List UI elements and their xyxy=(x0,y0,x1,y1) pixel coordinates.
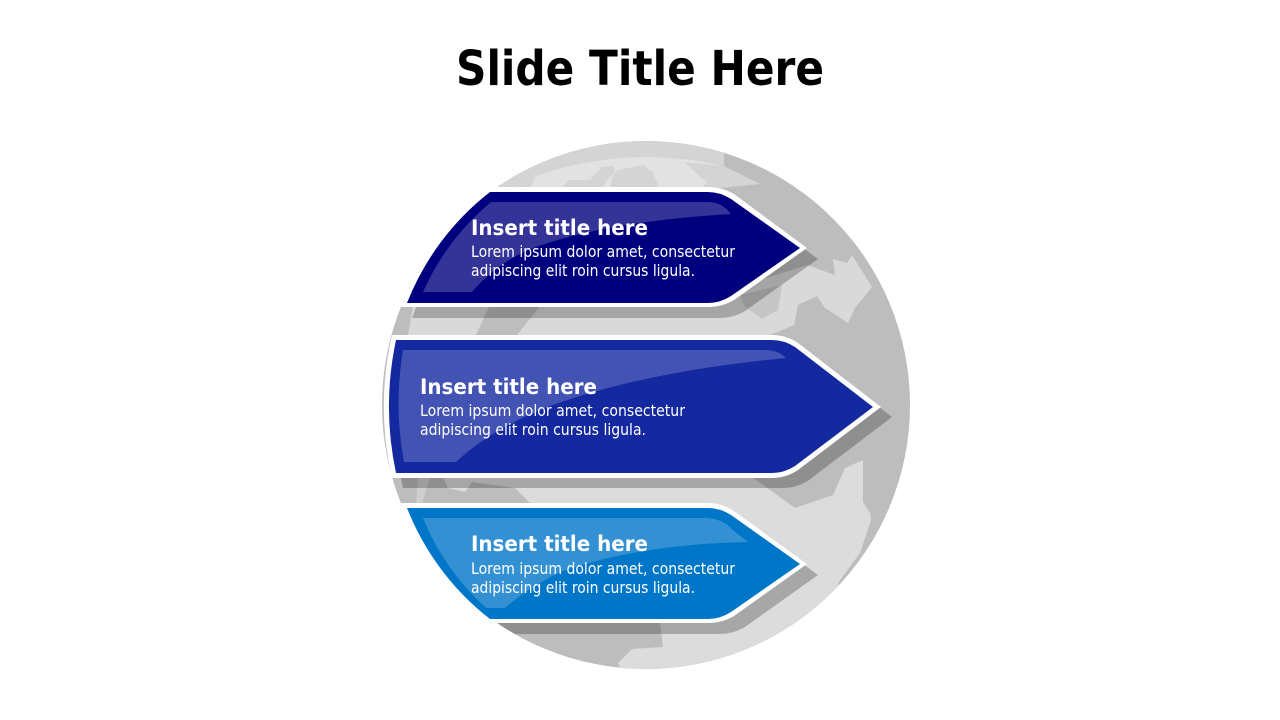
panel shadow: top xyxy=(412,250,818,318)
panel shadow: middle xyxy=(401,408,892,488)
panel: bottom arrow: adipiscing elit roin cursus ligula. xyxy=(471,578,695,597)
highlight xyxy=(423,518,748,608)
land: west strip xyxy=(408,307,489,335)
panel: middle arrow: adipiscing elit roin cursus ligula. xyxy=(420,420,646,439)
panel: bottom arrow xyxy=(401,503,807,623)
heading: Insert title here xyxy=(420,375,597,400)
highlight xyxy=(423,202,731,292)
panel: middle arrow xyxy=(384,335,881,478)
highlight xyxy=(399,350,786,462)
land: south-west strip xyxy=(416,478,430,503)
land: southern continent xyxy=(440,460,871,680)
land: northern islands xyxy=(513,162,722,187)
panel: top arrow: adipiscing elit roin cursus ligula. xyxy=(471,261,695,280)
body text: Lorem ipsum dolor amet, consectetur xyxy=(471,242,735,261)
title: Slide Title Here xyxy=(456,41,824,97)
heading: Insert title here xyxy=(471,216,648,241)
body text: Lorem ipsum dolor amet, consectetur xyxy=(420,401,685,420)
land: top ring xyxy=(498,141,752,188)
heading: Insert title here xyxy=(471,532,648,557)
land: east continent shaded patch xyxy=(740,285,782,319)
land: top cap xyxy=(512,157,718,187)
body text: Lorem ipsum dolor amet, consectetur xyxy=(471,559,735,578)
panel: top arrow xyxy=(401,187,807,307)
panel shadow: bottom xyxy=(498,566,818,634)
land: east continent xyxy=(517,255,872,335)
globe background xyxy=(380,130,912,680)
